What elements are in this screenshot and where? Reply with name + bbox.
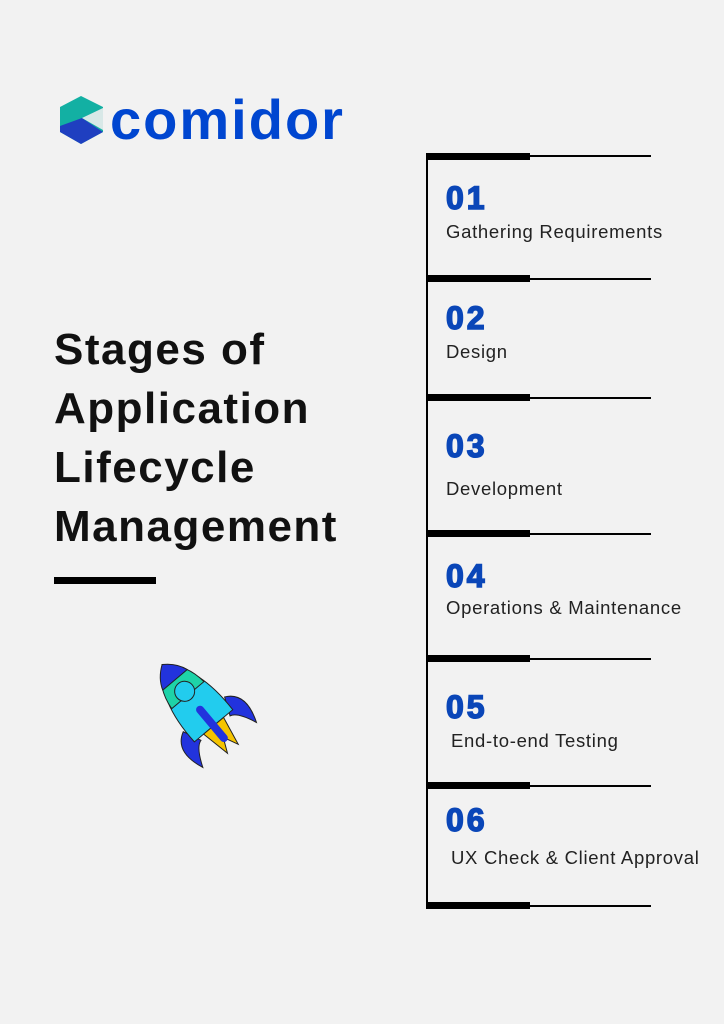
- title: Stages of: [54, 325, 266, 374]
- title: Application: [54, 384, 310, 433]
- title: Management: [54, 502, 338, 551]
- stage 03: [446, 428, 563, 499]
- icon: hexagon: [60, 96, 103, 144]
- logo: [60, 92, 345, 150]
- stage 01: [446, 180, 663, 242]
- stage 02: 02: [446, 300, 488, 336]
- title: [54, 325, 338, 551]
- title underline: [54, 577, 156, 584]
- stage 06: UX Check & Client Approval: [451, 847, 700, 868]
- stage 04: Operations & Maintenance: [446, 597, 682, 618]
- stage 04: [446, 558, 682, 618]
- stage 06: [446, 802, 700, 868]
- timeline dividers: [427, 153, 530, 160]
- stage 01: Gathering Requirements: [446, 221, 663, 242]
- icon: rocket: [160, 664, 258, 768]
- stage 05: [446, 689, 619, 751]
- stage 05: End-to-end Testing: [451, 730, 619, 751]
- stage 02: Design: [446, 341, 508, 362]
- stage 05: 05: [446, 689, 488, 725]
- title: Lifecycle: [54, 443, 256, 492]
- stage 03: Development: [446, 478, 563, 499]
- stage 03: 03: [446, 428, 488, 464]
- stage 04: 04: [446, 558, 488, 594]
- stage 02: [446, 300, 508, 362]
- stage 06: 06: [446, 802, 488, 838]
- stage 01: 01: [446, 180, 488, 216]
- timeline vertical line: [426, 153, 428, 909]
